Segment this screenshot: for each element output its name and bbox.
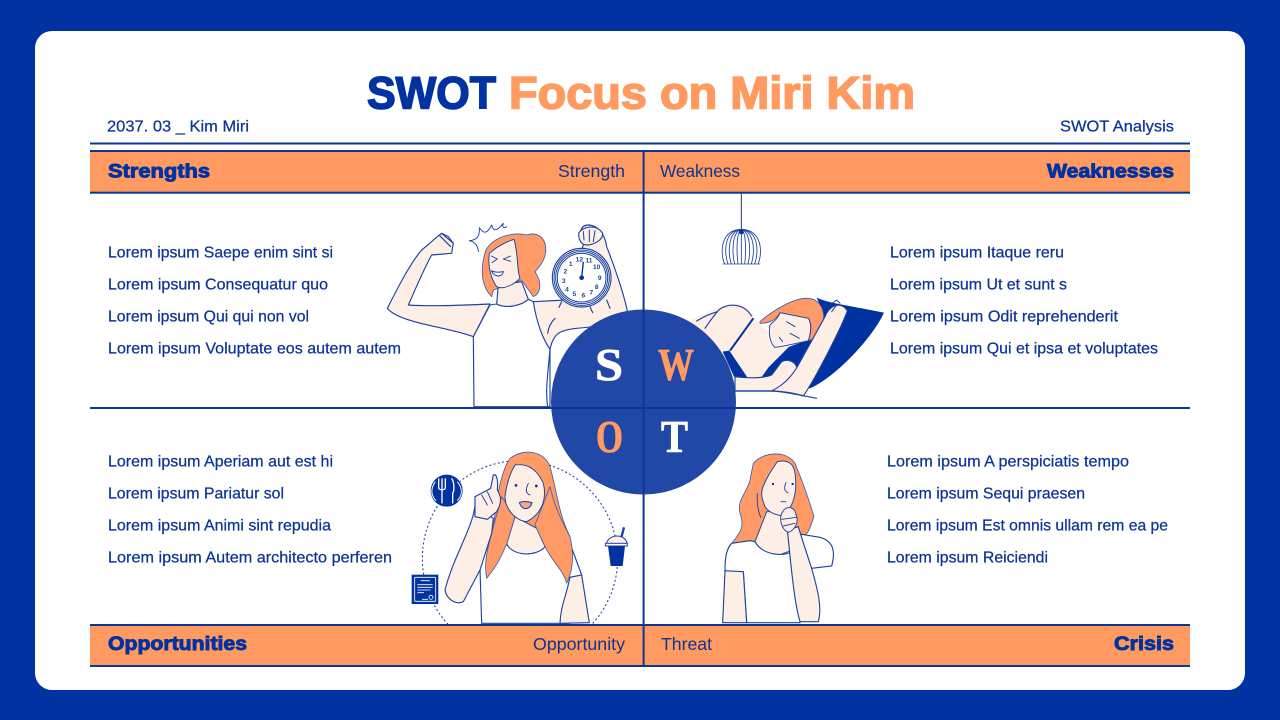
badge letter S: S (595, 340, 623, 390)
text block: opportunities list: Lorem ipsum Aperiam aut est hi (108, 454, 333, 470)
label: Weakness: Weakness (660, 161, 740, 181)
heading: Weaknesses: Weaknesses (1047, 162, 1174, 182)
text block: weaknesses list: Lorem ipsum Odit reprehenderit (890, 308, 1119, 326)
label: Strength: Strength (558, 161, 625, 181)
text block: threats list: Lorem ipsum Est omnis ullam rem ea pe (887, 518, 1168, 534)
text block: opportunities list: Lorem ipsum Animi sint repudia (108, 518, 331, 534)
text block: strengths list (108, 244, 401, 358)
text block: strengths list: Lorem ipsum Consequatur quo (108, 276, 328, 294)
band: bottom left and right header (90, 625, 1190, 665)
text block: threats list: Lorem ipsum Sequi praesen (887, 486, 1085, 502)
title: SWOT (367, 68, 496, 118)
badge letter T: T (661, 412, 688, 462)
text block: weaknesses list: Lorem ipsum Ut et sunt s (890, 276, 1067, 294)
illustration: woman flexing with clock: 7 (589, 289, 593, 296)
heading: Strengths: Strengths (108, 162, 210, 182)
illustration: woman thinking (723, 454, 833, 623)
subtitle: SWOT Analysis: SWOT Analysis (1060, 118, 1174, 136)
illustration: woman flexing with clock: 6 (581, 292, 585, 299)
text block: strengths list: Lorem ipsum Saepe enim sint si (108, 244, 333, 262)
illustration: woman with idea and icons (412, 452, 627, 656)
badge letter W: W (658, 340, 694, 390)
label: Threat: Threat (661, 634, 712, 654)
illustration: woman flexing with clock: 9 (598, 275, 602, 282)
illustration: woman flexing with clock: 4 (565, 286, 569, 293)
text block: opportunities list: Lorem ipsum Autem architecto perferen (108, 550, 392, 566)
icon: fork and knife (431, 475, 463, 507)
band: top left and right header (90, 151, 1190, 192)
illustration: woman sleeping under lamp (687, 193, 884, 398)
label: Opportunity: Opportunity (533, 634, 625, 654)
illustration: woman flexing with clock: 8 (595, 284, 599, 291)
illustration: woman flexing with clock (387, 223, 628, 407)
illustration: woman flexing with clock: 12 (576, 256, 583, 263)
illustration: woman flexing with clock: 3 (562, 278, 566, 285)
illustration: woman flexing with clock: 2 (563, 268, 567, 275)
illustration: woman flexing with clock: 5 (572, 291, 576, 298)
text block: opportunities list (108, 454, 392, 566)
text block: weaknesses list: Lorem ipsum Qui et ipsa et voluptates (890, 340, 1158, 358)
heading: Crisis: Crisis (1114, 634, 1174, 655)
badge letter O: O (596, 412, 623, 462)
illustration: woman flexing with clock: 11 (585, 258, 593, 265)
text block: strengths list: Lorem ipsum Voluptate eos autem autem (108, 340, 401, 358)
illustration: woman flexing with clock: 10 (593, 264, 601, 271)
text block: weaknesses list: Lorem ipsum Itaque reru (890, 244, 1064, 262)
text block: threats list: Lorem ipsum Reiciendi (887, 550, 1048, 566)
text block: threats list (887, 454, 1168, 566)
text block: weaknesses list (890, 244, 1158, 358)
icon: document (412, 575, 438, 604)
circle: SWOT center badge (551, 310, 736, 494)
illustration: woman flexing with clock: 1 (569, 261, 573, 268)
icon: drink cup (605, 527, 627, 566)
text block: opportunities list: Lorem ipsum Pariatur sol (108, 486, 284, 502)
text block: threats list: Lorem ipsum A perspiciatis tempo (887, 454, 1129, 470)
heading: Opportunities: Opportunities (108, 634, 247, 655)
date and author: 2037. 03 _ Kim Miri (107, 118, 249, 136)
title: Focus on Miri Kim (509, 68, 915, 118)
text block: strengths list: Lorem ipsum Qui qui non vol (108, 308, 309, 326)
